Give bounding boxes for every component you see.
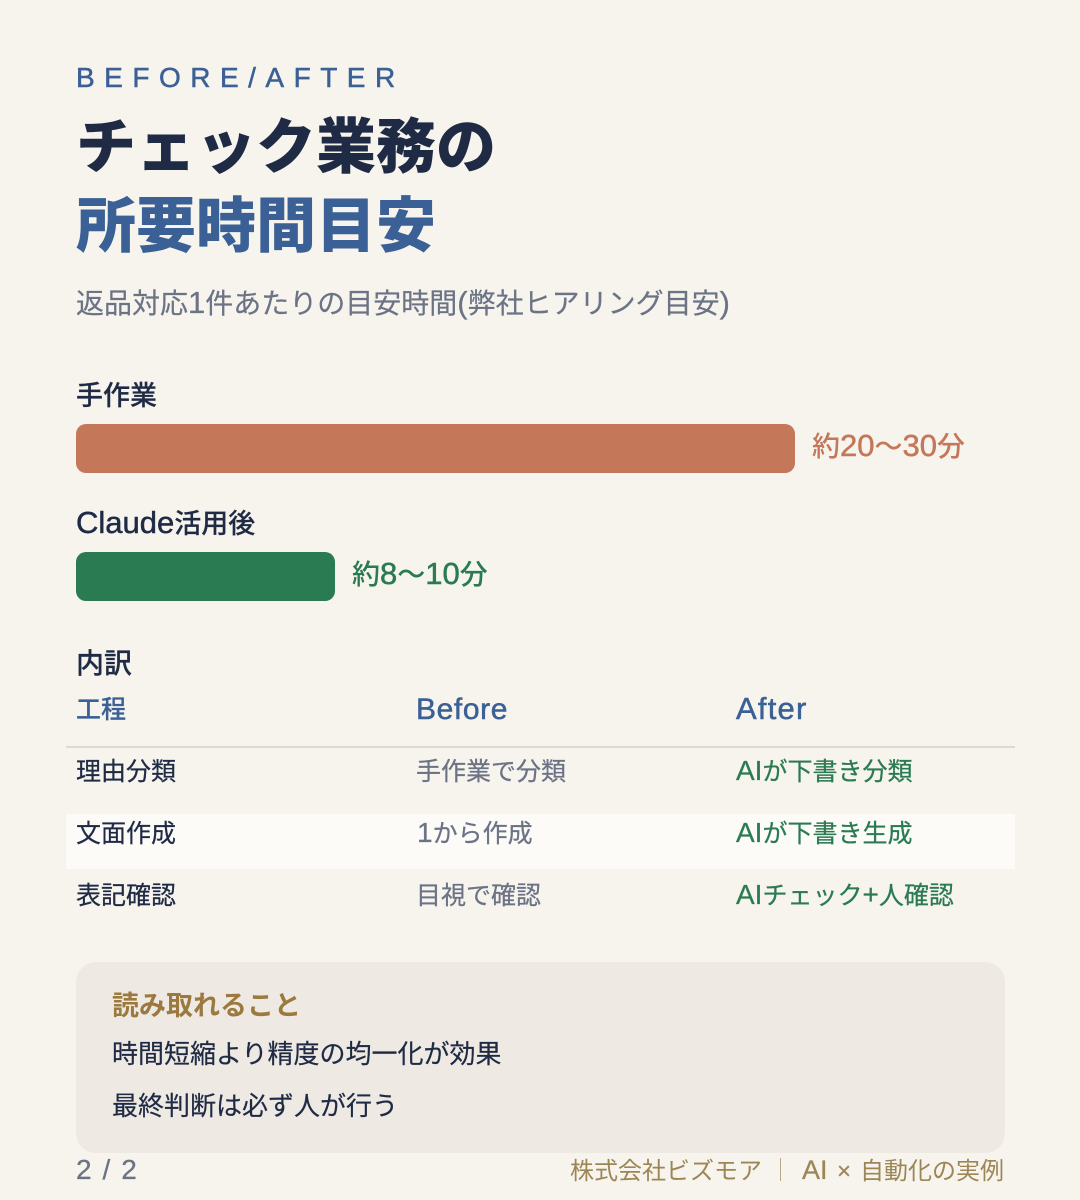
heading: breakdown: 内訳 [76,642,132,682]
header: after: After [736,691,807,726]
value: manual: 約20〜30分 [812,425,965,465]
footer credit [570,1151,1004,1186]
table [66,690,1015,912]
row 1 before: 手作業で分類 [416,752,566,788]
bar: Claude [76,552,335,601]
row 1 [76,752,912,788]
footer tagline: AI [802,1155,828,1185]
separator [780,1158,781,1181]
page number: 2 / 2 [76,1154,138,1185]
value: Claude: 約8〜10分 [352,553,488,593]
row 1 step: 理由分類 [76,752,176,788]
header: before: Before [416,693,508,726]
header row [66,690,1015,748]
row 3 [76,876,954,912]
row 2 before: 1から作成 [417,814,533,850]
row 3 before: 目視で確認 [416,876,541,912]
tagline end: 自動化の実例 [860,1151,1004,1186]
eyebrow: BEFORE/AFTER [76,62,405,93]
row 2 step: 文面作成 [76,814,176,850]
subtitle: 返品対応1件あたりの目安時間(弊社ヒアリング目安) [76,282,730,322]
callout heading: 読み取れること [112,984,301,1023]
callout line 2: 最終判断は必ず人が行う [112,1086,398,1123]
row 3 after: AIチェック+人確認 [736,876,954,912]
multiply sign: × [837,1158,851,1185]
bar: manual [76,424,795,473]
row 2 [66,814,1015,869]
label: manual: 手作業 [76,374,157,413]
callout line 1: 時間短縮より精度の均一化が効果 [112,1034,501,1071]
callout [76,962,1005,1153]
title line 2: 所要時間目安 [76,178,436,265]
title line 1: チェック業務の [76,99,496,186]
company name: 株式会社ビズモア [570,1151,762,1186]
header: step: 工程 [76,690,126,726]
row 2 after: AIが下書き生成 [736,814,912,850]
row 3 step: 表記確認 [76,876,176,912]
label: Claude: Claude活用後 [76,502,255,541]
row 1 after: AIが下書き分類 [736,752,912,788]
title [76,99,496,265]
